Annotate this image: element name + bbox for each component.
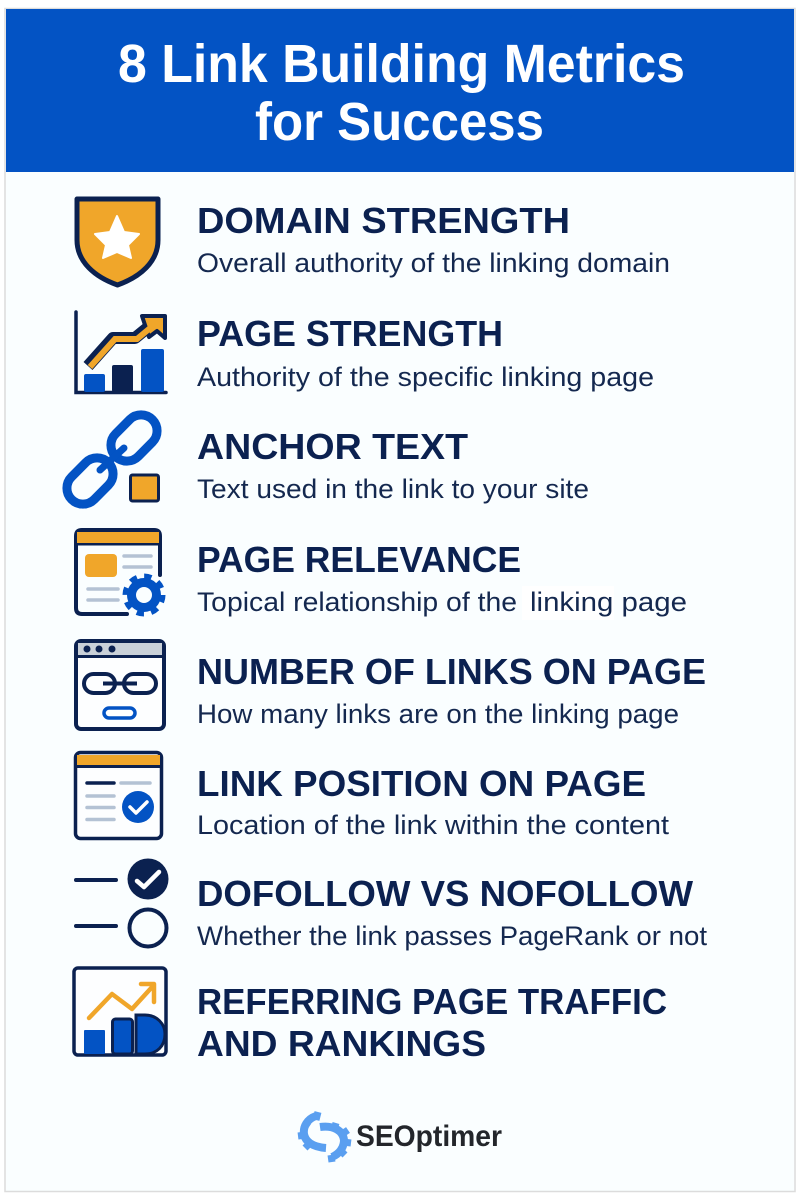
text: page relevance: PAGE RELEVANCE	[197, 539, 521, 580]
text: anchor text: ANCHOR TEXT	[197, 426, 468, 467]
icon: browser with links	[76, 641, 164, 729]
title: 8 Link Building Metrics	[118, 34, 685, 94]
icon: logo gear	[298, 1112, 351, 1162]
icon: page with check badge	[75, 752, 162, 838]
text: domain strength: Overall authority of the linking domain	[197, 248, 670, 278]
icon: shield with star	[77, 199, 158, 285]
title	[118, 34, 685, 152]
text: link position on page	[197, 763, 670, 840]
text: page relevance: Topical relationship of the	[197, 587, 517, 617]
text: link position on page: Location of the link within the content	[197, 810, 670, 840]
header banner	[6, 9, 794, 172]
text: referring page traffic and rankings: AND RANKINGS	[197, 1023, 486, 1064]
text: domain strength: DOMAIN STRENGTH	[197, 200, 570, 241]
text: domain strength	[197, 200, 670, 278]
icon: growth bar chart	[76, 312, 166, 392]
text: page strength: Authority of the specific linking page	[197, 362, 654, 392]
icon: chain link	[60, 408, 164, 511]
logo: SEOptimer	[298, 1112, 502, 1162]
icon: dofollow and nofollow toggles	[76, 858, 168, 946]
text: dofollow vs nofollow: Whether the link passes PageRank or not	[197, 921, 708, 951]
text: page relevance	[197, 539, 687, 620]
title: for Success	[255, 92, 544, 152]
text: anchor text	[197, 426, 589, 504]
text: number of links on page: NUMBER OF LINKS ON PAGE	[197, 651, 706, 692]
icon: traffic chart	[74, 968, 166, 1055]
text: page relevance: linking page	[530, 587, 687, 617]
icon: page with gear	[76, 530, 162, 614]
text: page strength	[197, 313, 654, 392]
text: anchor text: Text used in the link to your site	[197, 474, 589, 504]
text: referring page traffic and rankings	[197, 981, 667, 1064]
text: dofollow vs nofollow: DOFOLLOW VS NOFOLLOW	[197, 873, 693, 914]
text: link position on page: LINK POSITION ON PAGE	[197, 763, 646, 804]
text: dofollow vs nofollow	[197, 873, 708, 951]
text: number of links on page: How many links are on the linking page	[197, 699, 679, 729]
text: page strength: PAGE STRENGTH	[197, 313, 503, 354]
logo wordmark: SEOptimer	[356, 1120, 502, 1153]
text: referring page traffic and rankings: REFERRING PAGE TRAFFIC	[197, 981, 667, 1022]
text: number of links on page	[197, 651, 706, 729]
